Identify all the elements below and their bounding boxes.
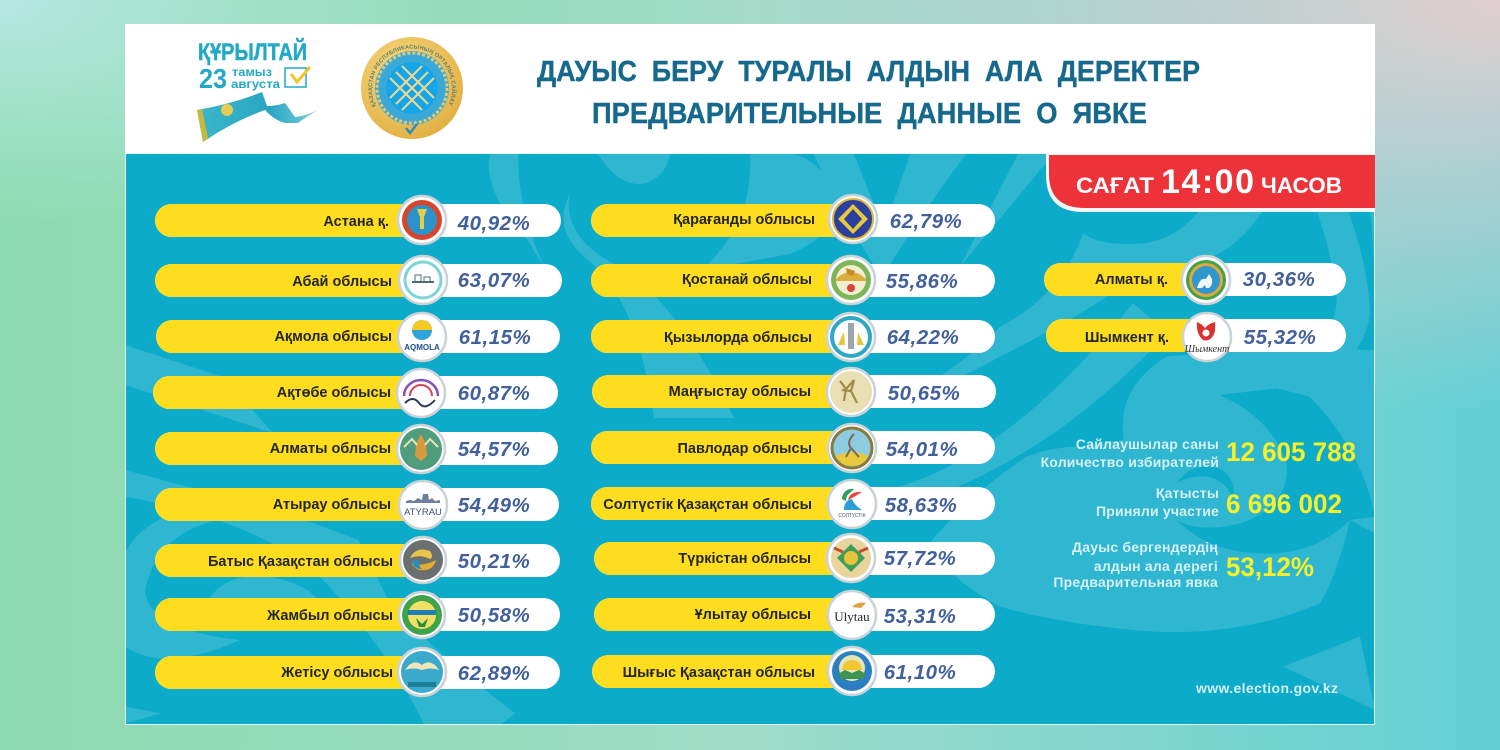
row: Солтүстік Қазақстан: СОЛТҮСТІК [838, 513, 866, 519]
row: Қарағанды: 62,79% [890, 210, 962, 233]
row: Астана: 40,92% [457, 212, 530, 235]
row: Павлодар: Павлодар облысы [677, 441, 812, 457]
teal panel with swirl background [125, 150, 1375, 727]
row: Павлодар: 54,01% [886, 438, 958, 461]
row: Батыс Қазақстан: 50,21% [458, 550, 530, 573]
row: Түркістан: Түркістан облысы [678, 551, 811, 567]
column: middle regions [591, 195, 996, 695]
row: Қостанай [591, 256, 995, 304]
row: Абай: 63,07% [458, 269, 530, 292]
row: Жамбыл: Жамбыл облысы [266, 608, 393, 624]
red time banner [1046, 153, 1375, 212]
row: Қарағанды [591, 195, 995, 243]
row: Батыс Қазақстан [155, 537, 560, 583]
stat: turnout: Предварительная явка [1053, 574, 1218, 590]
row: Павлодар [591, 424, 995, 472]
logo: Құрылтай 23 August: августа [231, 77, 280, 91]
row: Жамбыл: 50,58% [458, 604, 530, 627]
title [537, 56, 1200, 130]
row: Жетісу: Жетісу облысы [280, 665, 393, 681]
row: Қостанай: 55,86% [886, 270, 958, 293]
logo: Құрылтай 23 August [197, 38, 318, 142]
stat: voters: Сайлаушылар саны [1076, 436, 1219, 452]
stat: participated: Приняли участие [1096, 503, 1219, 519]
stat: participated: 6 696 002 [1226, 489, 1342, 519]
row: Жетісу: 62,89% [458, 662, 530, 685]
row: Солтүстік Қазақстан [591, 480, 995, 528]
row: Түркістан: 57,72% [884, 547, 956, 570]
row: Ақмола [156, 313, 560, 361]
title: ДАУЫС БЕРУ ТУРАЛЫ АЛДЫН АЛА ДЕРЕКТЕР [537, 56, 1200, 88]
red time banner: 14:00 [1161, 163, 1254, 201]
row: Маңғыстау [592, 368, 996, 416]
header panel [125, 24, 1375, 153]
row: Атырау: 54,49% [458, 494, 530, 517]
row: Жамбыл [155, 592, 560, 638]
column: cities [1044, 256, 1346, 361]
stat: voters: Количество избирателей [1041, 454, 1219, 470]
row: Ақмола: 61,15% [459, 326, 531, 349]
row: Ақмола: Ақмола облысы [274, 329, 392, 345]
row: Ақтөбе [153, 369, 558, 417]
row: Шымкент қ.: 55,32% [1244, 326, 1316, 349]
row: Астана: Астана қ. [323, 214, 389, 230]
row: Алматы облысы [155, 425, 558, 473]
red time banner: САҒАТ [1076, 173, 1155, 198]
row: Шымкент қ.: Шымкент қ. [1085, 330, 1169, 346]
row: Алматы қ.: 30,36% [1243, 268, 1315, 291]
stat: voters: 12 605 788 [1226, 437, 1356, 467]
red time banner: ЧАСОВ [1261, 173, 1342, 198]
row: Алматы облысы: 54,57% [458, 438, 530, 461]
stat: voters [1041, 436, 1356, 470]
row: Қызылорда: Қызылорда облысы [664, 330, 812, 346]
row: Ұлытау: Ұлытау облысы [695, 607, 811, 623]
row: Шығыс Қазақстан [592, 647, 995, 695]
row: Қостанай: Қостанай облысы [682, 272, 812, 288]
row: Маңғыстау: 50,65% [888, 382, 960, 405]
stat: turnout: 53,12% [1226, 552, 1314, 582]
row: Ақтөбе: 60,87% [458, 382, 530, 405]
row: Солтүстік Қазақстан: 58,63% [885, 494, 957, 517]
row: Ұлытау [594, 591, 995, 639]
row: Алматы облысы: Алматы облысы [270, 441, 391, 457]
emblem: Central Election Commission seal [361, 37, 463, 139]
row: Ақтөбе: Ақтөбе облысы [277, 385, 391, 401]
row: Ұлытау: 53,31% [884, 605, 956, 628]
row: Атырау: ATYRAU [404, 507, 442, 518]
stat: turnout: алдын ала дерегі [1094, 558, 1218, 574]
logo: Құрылтай 23 August: 23 [199, 63, 227, 94]
stat: participated: Қатысты [1156, 485, 1219, 501]
stat: turnout [1053, 539, 1314, 590]
row: Алматы қ.: Алматы қ. [1095, 272, 1168, 288]
logo: Құрылтай 23 August: тамыз [232, 65, 272, 79]
row: Ақмола: AQMOLA [404, 343, 440, 352]
row: Қызылорда: 64,22% [887, 326, 959, 349]
logo: Құрылтай 23 August: ҚҰРЫЛТАЙ [198, 38, 307, 66]
row: Қарағанды: Қарағанды облысы [673, 212, 815, 228]
row: Солтүстік Қазақстан: Солтүстік Қазақстан облысы [603, 497, 812, 513]
row: Атырау [155, 481, 559, 529]
row: Атырау: Атырау облысы [273, 497, 391, 513]
stat: turnout: Дауыс бергендердің [1072, 539, 1218, 555]
row: Жетісу [155, 648, 560, 696]
row: Шығыс Қазақстан: Шығыс Қазақстан облысы [623, 665, 815, 681]
row: Алматы қ. [1044, 256, 1346, 304]
row: Абай: Абай облысы [292, 274, 392, 290]
row: Шымкент қ. [1046, 313, 1346, 361]
row: Абай [155, 256, 562, 304]
row: Ұлытау: Ulytau [834, 609, 870, 624]
row: Қызылорда [591, 313, 995, 361]
stat: participated [1096, 485, 1342, 519]
row: Маңғыстау: Маңғыстау облысы [669, 384, 811, 400]
website: www.election.gov.kz [1195, 680, 1338, 696]
row: Шығыс Қазақстан: 61,10% [884, 661, 956, 684]
row: Астана [155, 196, 561, 244]
title: ПРЕДВАРИТЕЛЬНЫЕ ДАННЫЕ О ЯВКЕ [592, 98, 1147, 130]
row: Шымкент қ.: Шымкент [1184, 344, 1229, 355]
row: Түркістан [594, 534, 995, 582]
column: left regions [153, 196, 562, 696]
row: Батыс Қазақстан: Батыс Қазақстан облысы [208, 554, 393, 570]
